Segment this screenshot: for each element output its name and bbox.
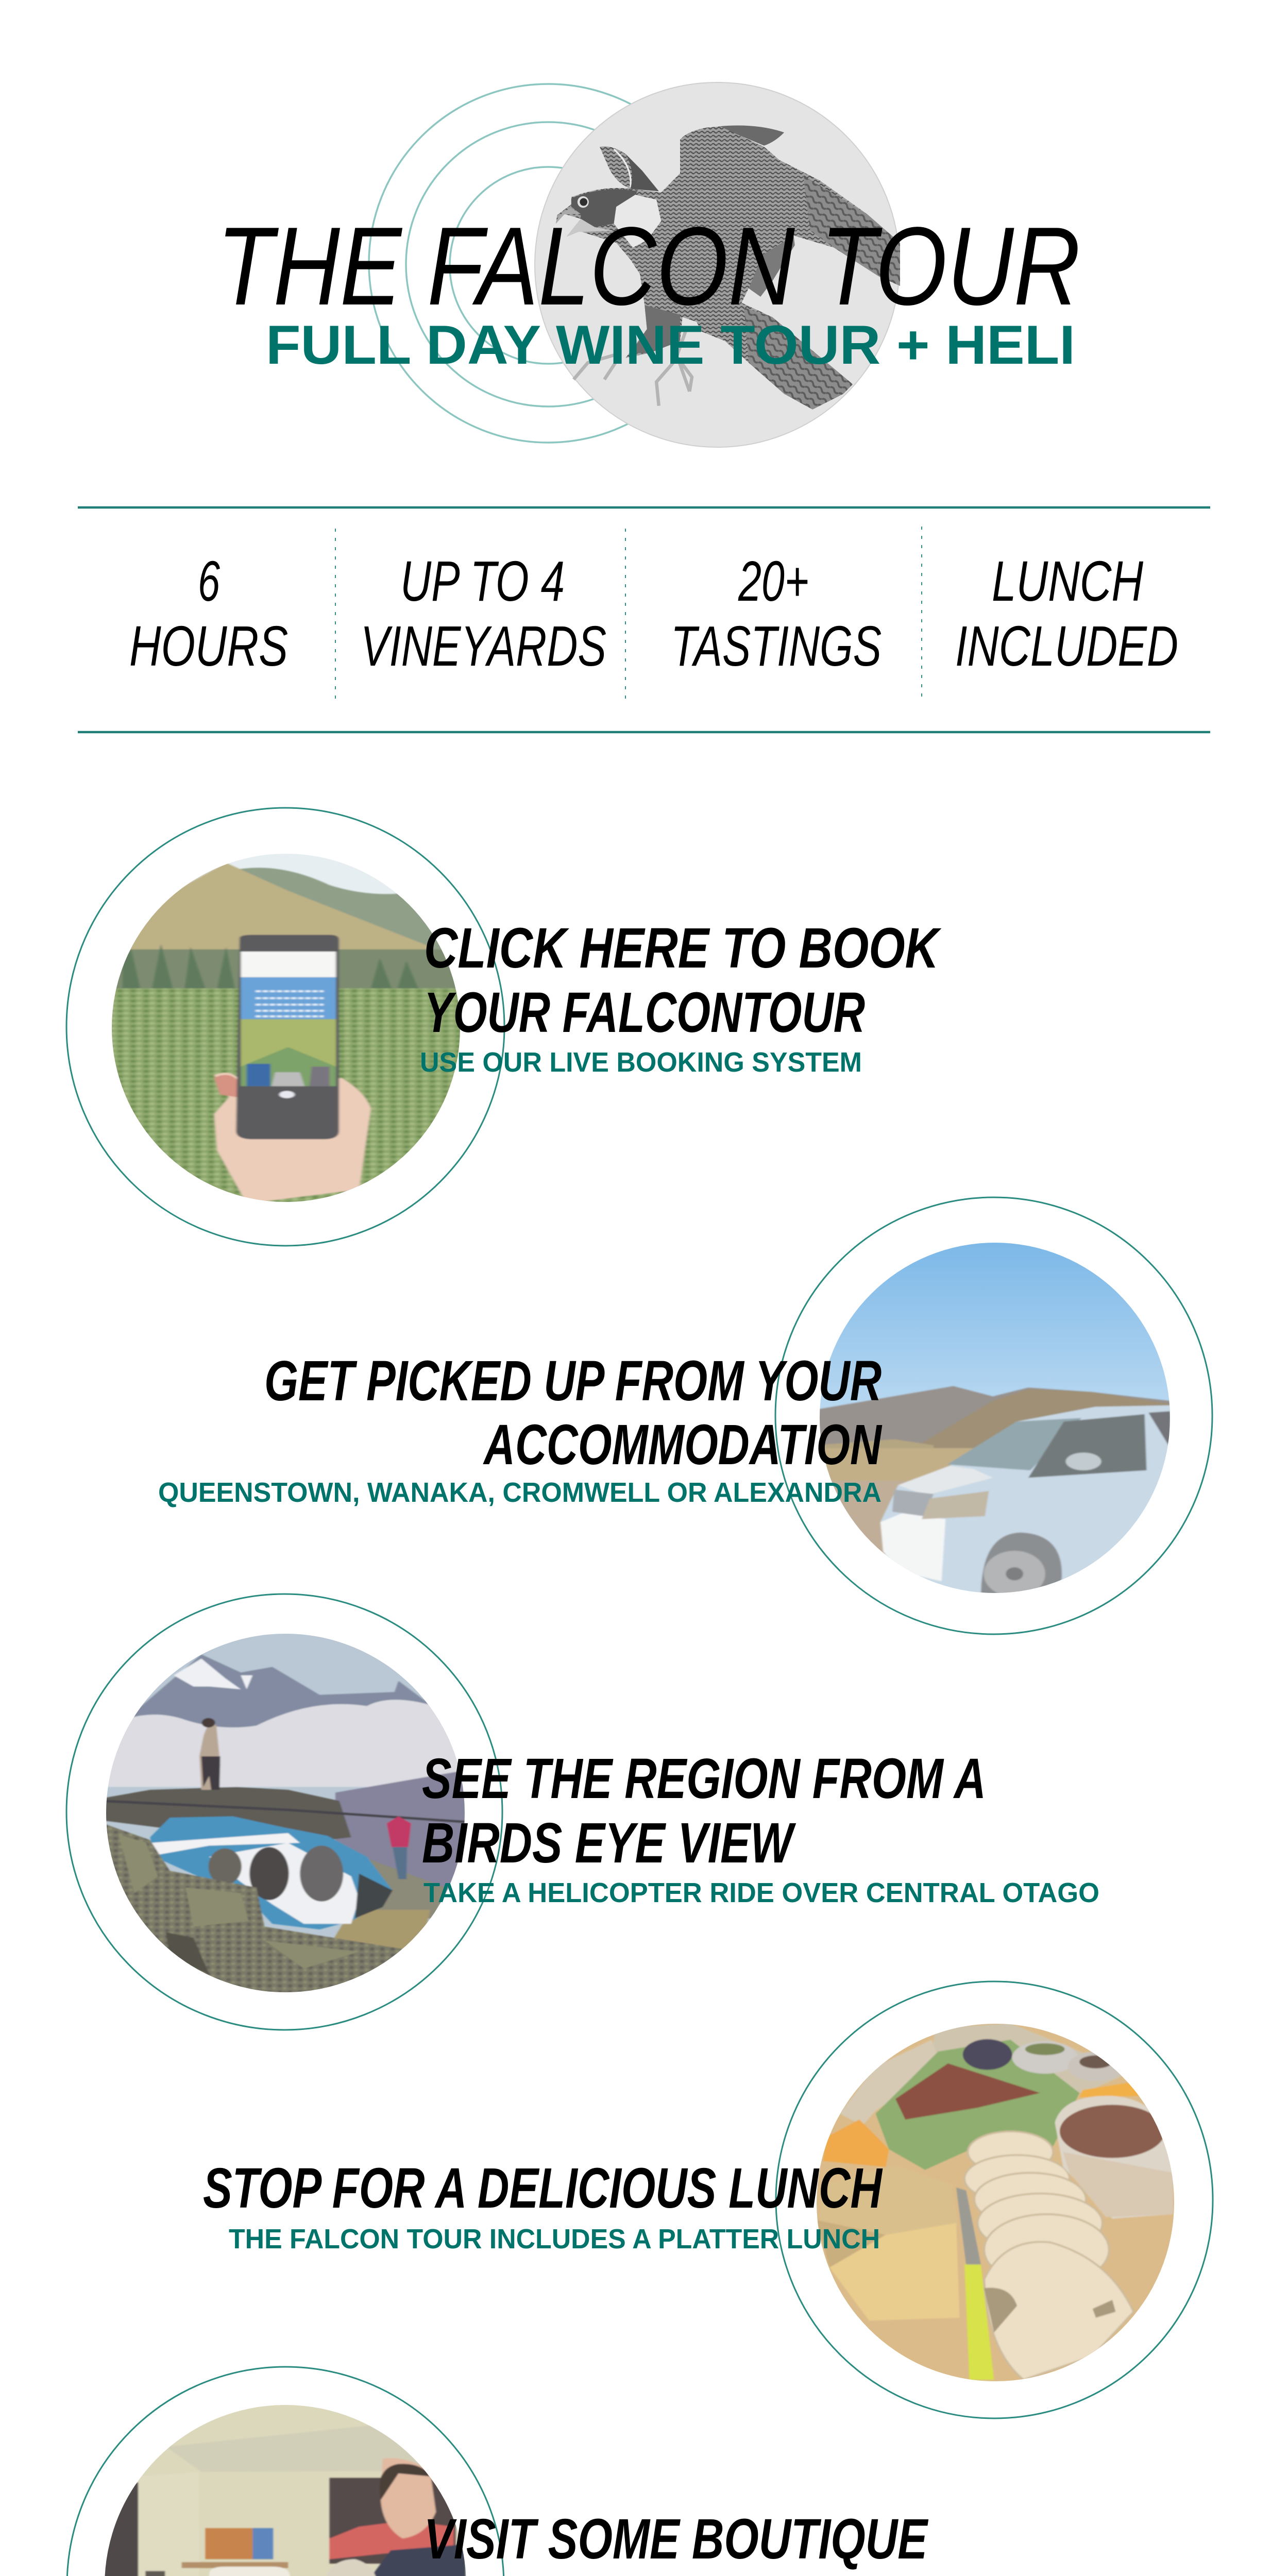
step 5 photo: vineyard tasting room — [103, 2405, 466, 2576]
step 3 heading — [422, 1747, 986, 1875]
stat: lunch: LUNCH — [992, 550, 1143, 613]
stat: hours: 6 — [198, 550, 221, 613]
step 4 ring — [776, 1981, 1213, 2418]
stat: hours — [129, 550, 288, 678]
stat: lunch — [955, 550, 1178, 678]
step 3 heading: BIRDS EYE VIEW — [422, 1811, 796, 1875]
step 1 subheading: USE OUR LIVE BOOKING SYSTEM — [420, 1047, 862, 1078]
stat: lunch: INCLUDED — [955, 615, 1178, 678]
step 4 photo: platter lunch — [817, 2023, 1174, 2381]
step 3 photo: helicopter on ridge — [103, 1634, 466, 1994]
step 4 subheading: THE FALCON TOUR INCLUDES A PLATTER LUNCH — [229, 2224, 880, 2255]
icon: falcon medallion — [535, 82, 900, 447]
step 1 heading: YOUR FALCONTOUR — [424, 981, 865, 1044]
stat: hours: HOURS — [129, 615, 288, 678]
stat: tastings: TASTINGS — [671, 615, 882, 678]
step 2 ring — [775, 1197, 1212, 1634]
step 2 photo: van — [816, 1243, 1171, 1597]
step 1 heading — [424, 917, 942, 1044]
stats panel — [78, 507, 1210, 732]
crackers — [964, 2131, 1133, 2380]
step 5 ring — [67, 2367, 504, 2576]
step 1 heading: CLICK HERE TO BOOK — [424, 917, 942, 980]
stat: vineyards: UP TO 4 — [400, 550, 565, 613]
step 3 subheading: TAKE A HELICOPTER RIDE OVER CENTRAL OTAGO — [423, 1877, 1099, 1908]
header artwork: concentric rings — [369, 84, 727, 443]
stat: vineyards: VINEYARDS — [361, 615, 606, 678]
step 2 heading — [264, 1349, 883, 1477]
step 1 ring — [66, 808, 504, 1246]
step 3 heading: SEE THE REGION FROM A — [422, 1747, 986, 1810]
step 2 subheading: QUEENSTOWN, WANAKA, CROMWELL OR ALEXANDRA — [158, 1477, 882, 1508]
step 4 heading: STOP FOR A DELICIOUS LUNCH — [203, 2157, 883, 2220]
stat: tastings: 20+ — [738, 550, 809, 613]
title: THE FALCON TOUR — [217, 204, 1080, 328]
stat: tastings — [671, 550, 882, 678]
step 2 heading: GET PICKED UP FROM YOUR — [264, 1349, 882, 1413]
step 2 heading: ACCOMMODATION — [483, 1413, 883, 1477]
step 1 photo: phone in vineyard — [105, 854, 466, 1206]
step 3 ring — [66, 1594, 502, 2030]
step 5 heading: VISIT SOME BOUTIQUE — [424, 2507, 929, 2571]
subtitle: FULL DAY WINE TOUR + HELI — [266, 314, 1075, 376]
stat: vineyards — [361, 550, 606, 678]
